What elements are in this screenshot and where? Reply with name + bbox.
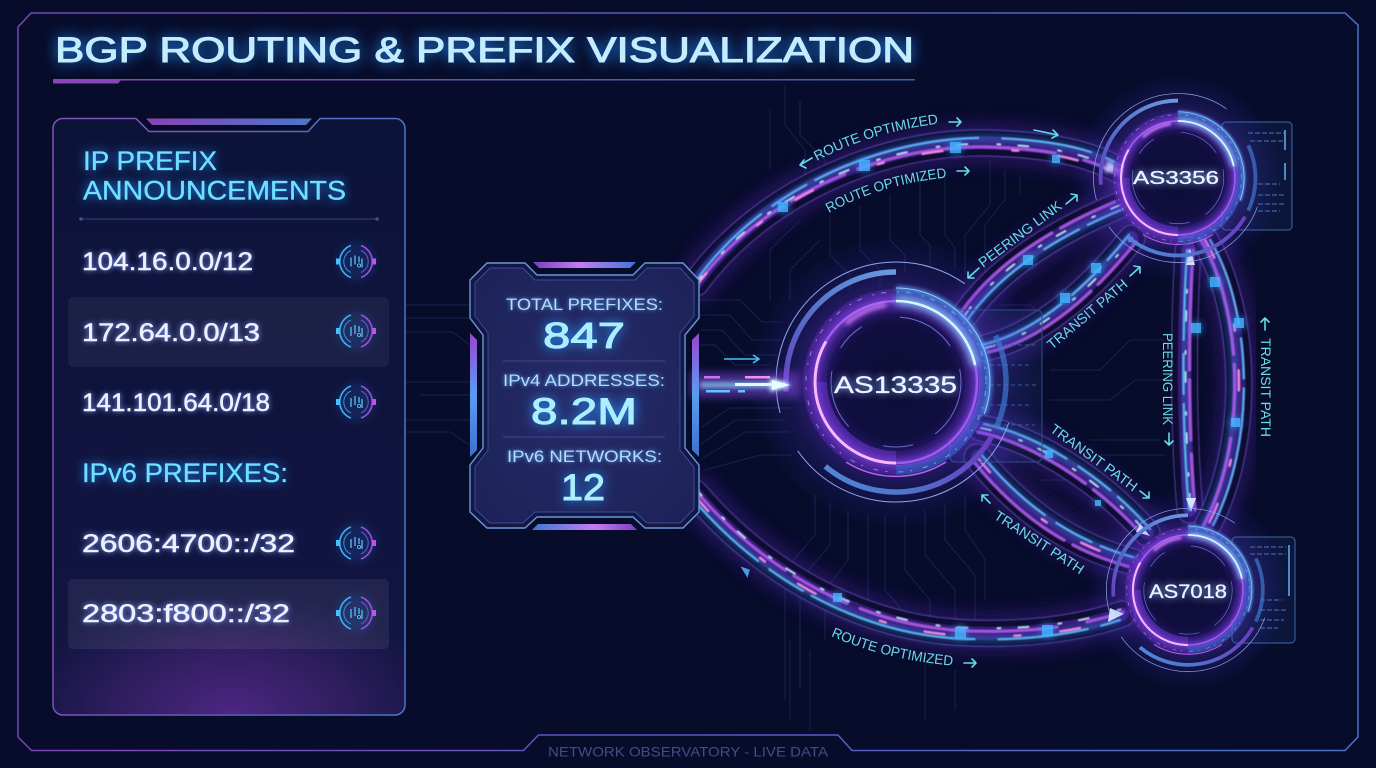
panel: IP prefix announcements [53, 118, 405, 715]
label: route optimized bottom: ROUTE OPTIMIZED [832, 628, 952, 666]
arrow: small flow on top arc [1034, 130, 1058, 138]
row: 172.64.0.0/13: 172.64.0.0/13 [82, 319, 260, 347]
row: 104.16.0.0/12 [82, 242, 376, 282]
link: peering AS3356 to AS7018 [1183, 250, 1195, 510]
panel frame [53, 118, 405, 715]
link: transit AS13335 to AS7018 upper [978, 424, 1150, 537]
node: AS3356 [1072, 72, 1284, 284]
link: top route optimized [694, 138, 1124, 289]
faint data panel beside AS7018 [1232, 537, 1295, 643]
label: route optimized upper: ROUTE OPTIMIZED [814, 114, 938, 160]
link: peering AS13335 to AS3356 [962, 201, 1123, 319]
stat: total prefixes [506, 296, 663, 356]
stat: total prefixes: 847 [543, 315, 625, 356]
label: transit path upper: TRANSIT PATH [1044, 276, 1131, 352]
row: 2606:4700::/32 [82, 523, 376, 563]
circuit traces background [405, 85, 1165, 730]
stat: IPv6 networks: 12 [561, 467, 605, 508]
heading: IP prefix announcements: IP PREFIX [83, 146, 217, 176]
label: peering link diagonal [968, 194, 1077, 278]
heading: IPv6 prefixes: IPv6 PREFIXES: [82, 458, 288, 488]
row: 141.101.64.0/18 [82, 382, 376, 422]
node: AS7018: AS7018 [1149, 582, 1227, 603]
top accent bar [533, 262, 636, 268]
labels on links [740, 114, 1274, 668]
stat: IPv4 addresses [503, 372, 665, 432]
node: AS7018 [1086, 488, 1290, 692]
stat: IPv4 addresses: 8.2M [531, 391, 637, 432]
row: 2803:f800::/32: 2803:f800::/32 [82, 600, 290, 628]
stat: IPv4 addresses: IPv4 ADDRESSES: [503, 372, 665, 390]
title [53, 31, 915, 84]
label: transit path lower left: TRANSIT PATH [991, 507, 1087, 577]
faint data panel beside AS3356 [1222, 122, 1292, 230]
row: 172.64.0.0/13 [68, 297, 389, 367]
row: 141.101.64.0/18: 141.101.64.0/18 [82, 389, 270, 417]
label: transit path lower right: TRANSIT PATH [1047, 420, 1141, 495]
bottom accent bar [532, 524, 637, 530]
row: 2803:f800::/32 [68, 579, 389, 649]
right accent bar [692, 333, 699, 457]
node: AS13335: AS13335 [834, 372, 957, 399]
row: 104.16.0.0/12: 104.16.0.0/12 [82, 248, 253, 276]
stat: IPv6 networks: IPv6 NETWORKS: [507, 448, 662, 466]
faint data panel beside AS13335 [950, 310, 1042, 462]
link: transit AS7018 to AS13335 lower [974, 453, 1136, 567]
heading: IP prefix announcements: ANNOUNCEMENTS [83, 176, 346, 206]
network links [693, 138, 1244, 639]
title: BGP ROUTING & PREFIX VISUALIZATION [55, 31, 914, 70]
label: peering link diagonal: PEERING LINK [975, 197, 1065, 270]
stat: IPv6 networks [507, 448, 662, 508]
label: route optimized lower: ROUTE OPTIMIZED [825, 168, 946, 212]
row: 2606:4700::/32: 2606:4700::/32 [82, 530, 295, 558]
link: transit AS3356 to AS7018 [1200, 240, 1244, 525]
footer: NETWORK OBSERVATORY - LIVE DATA [548, 744, 829, 760]
panel purple glow [54, 480, 404, 714]
stat: total prefixes: TOTAL PREFIXES: [506, 296, 663, 314]
panel top accent [146, 118, 312, 125]
link: bottom route optimized [693, 488, 1123, 639]
label: peering link vertical: PEERING LINK [1160, 333, 1176, 426]
label: route optimized upper [799, 114, 962, 169]
panel: network statistics [470, 262, 699, 530]
small arrow above the beam [724, 355, 759, 363]
arrow: small flow on bottom arc [740, 566, 751, 578]
node: AS3356: AS3356 [1133, 168, 1219, 188]
node: AS13335 [746, 232, 1046, 532]
label: transit path vertical: TRANSIT PATH [1258, 338, 1274, 437]
heading: IP prefix announcements [83, 146, 346, 206]
link: transit AS13335 to AS3356 [982, 235, 1136, 352]
data packets on links [778, 142, 1244, 638]
input beam from stats to AS13335 [690, 355, 800, 398]
title underline [53, 79, 915, 84]
left accent bar [470, 333, 477, 457]
